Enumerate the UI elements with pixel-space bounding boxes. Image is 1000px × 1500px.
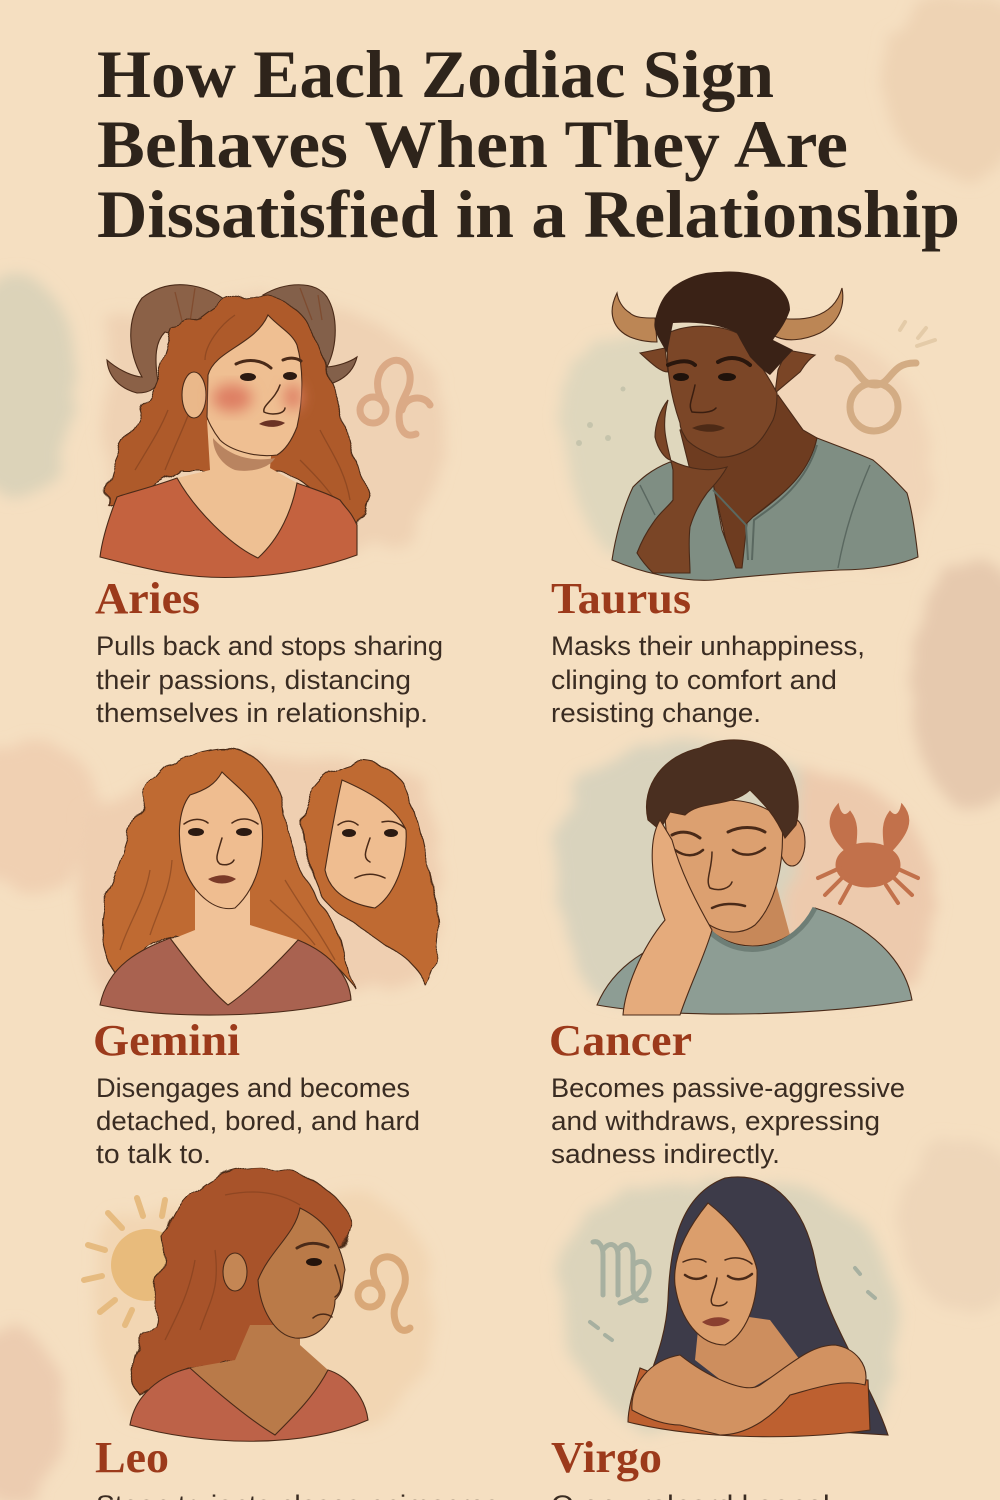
icon: Leo symbol <box>358 1257 410 1330</box>
icon: Virgo symbol <box>593 1242 649 1303</box>
Leo hair <box>132 1166 350 1395</box>
Taurus hand and arm <box>637 400 727 573</box>
panel: Gemini <box>77 747 441 1015</box>
Virgo hair <box>640 1177 888 1435</box>
Aries ear <box>182 372 206 418</box>
Cancer collar <box>710 908 815 949</box>
Gemini hair strands <box>120 860 335 960</box>
Leo hair strands <box>165 1192 300 1340</box>
Gemini main features <box>184 819 258 884</box>
Virgo spark marks <box>590 1268 875 1340</box>
Gemini second twin hair <box>304 763 439 985</box>
heading: Cancer: Cancer <box>549 1016 692 1065</box>
panel: Leo <box>84 1166 433 1441</box>
text: Gemini description: Disengages and becomes <box>96 1073 410 1103</box>
panel: Cancer <box>555 740 935 1015</box>
heading: Virgo: Virgo <box>551 1433 662 1482</box>
title: How Each Zodiac Sign <box>97 36 774 112</box>
Taurus speckles <box>576 386 626 446</box>
text: Taurus description: clinging to comfort and <box>551 665 837 695</box>
title: Behaves When They Are <box>97 106 848 182</box>
icon: Leo symbol Aries panel <box>360 360 430 435</box>
text: Aries description: themselves in relationship. <box>96 698 428 728</box>
Virgo crossed arms <box>632 1345 866 1435</box>
icon: crab <box>818 805 918 903</box>
text: Aries description <box>96 631 443 728</box>
panel: Aries <box>100 285 446 578</box>
Virgo face <box>675 1203 757 1345</box>
Taurus face <box>667 326 777 457</box>
Leo shirt <box>130 1368 368 1441</box>
Aries facial features <box>236 358 301 427</box>
text: Cancer description: sadness indirectly. <box>551 1139 780 1169</box>
heading: Aries: Aries <box>95 574 200 623</box>
Virgo top <box>628 1368 870 1437</box>
Leo neck <box>190 1325 328 1435</box>
Cancer watercolor wash <box>555 740 935 1000</box>
Gemini main neck and chest <box>170 890 298 1005</box>
Aries hair <box>108 295 369 532</box>
Leo watercolor wash <box>95 1190 433 1425</box>
Gemini main face <box>179 772 263 909</box>
Cancer ear <box>779 818 805 866</box>
icon: Taurus bull horns <box>612 288 843 342</box>
Aries neck shadow <box>213 438 275 471</box>
title <box>97 36 960 252</box>
text: Cancer description: Becomes passive-aggressive <box>551 1073 905 1103</box>
Taurus shirt <box>612 438 918 580</box>
Aries face <box>207 315 302 456</box>
Taurus collar lines <box>713 445 817 560</box>
text: Gemini description: detached, bored, and hard <box>96 1106 420 1136</box>
panel: Virgo <box>558 1177 898 1437</box>
Cancer facial features <box>672 828 765 908</box>
heading: Taurus: Taurus <box>551 574 691 623</box>
title: Dissatisfied in a Relationship <box>97 176 960 252</box>
text: Aries description: their passions, distancing <box>96 665 411 695</box>
Aries shirt <box>100 478 357 578</box>
Taurus ears <box>640 348 815 393</box>
text: Gemini description: to talk to. <box>96 1139 211 1169</box>
Cancer face <box>665 800 783 932</box>
Leo ear <box>223 1253 247 1291</box>
heading: Leo: Leo <box>95 1433 169 1482</box>
Taurus facial features <box>668 358 750 432</box>
Aries hair strands <box>135 315 350 515</box>
Virgo watercolor wash <box>558 1181 898 1430</box>
Cancer hand and arm <box>623 820 712 1015</box>
Taurus neck <box>680 395 817 568</box>
Gemini watercolor wash <box>77 755 441 1005</box>
text: Gemini description <box>96 1073 420 1169</box>
icon: Taurus symbol <box>838 358 916 431</box>
Cancer shirt <box>597 908 912 1014</box>
Gemini main hair <box>102 747 352 985</box>
Virgo facial features <box>683 1258 752 1326</box>
text: Cancer description: and withdraws, expressing <box>551 1106 880 1136</box>
text: Cancer description <box>551 1073 905 1169</box>
Taurus watercolor wash <box>564 320 932 570</box>
Aries blush <box>212 384 302 412</box>
text: Aries description: Pulls back and stops sharing <box>96 631 443 661</box>
Taurus shirt folds <box>640 465 870 568</box>
Aries watercolor wash <box>103 295 446 555</box>
Cancer neck <box>705 880 790 952</box>
Gemini second twin features <box>338 821 405 878</box>
icon: Aries ram horns <box>107 285 357 393</box>
heading: Gemini: Gemini <box>93 1016 240 1065</box>
text: Taurus description: resisting change. <box>551 698 761 728</box>
Leo face <box>258 1208 345 1338</box>
Cancer hair <box>647 740 798 838</box>
text: Taurus description <box>551 631 865 728</box>
Taurus spark marks <box>900 322 935 346</box>
Gemini second twin face <box>325 780 406 908</box>
Aries neck and chest <box>177 420 297 558</box>
icon: sun <box>84 1198 183 1325</box>
Leo facial features <box>297 1243 341 1318</box>
panel: Taurus <box>564 272 935 580</box>
Taurus hair <box>654 272 793 375</box>
Virgo neck <box>695 1310 800 1395</box>
text: Taurus description: Masks their unhappiness, <box>551 631 865 661</box>
Gemini shirt <box>100 938 351 1015</box>
